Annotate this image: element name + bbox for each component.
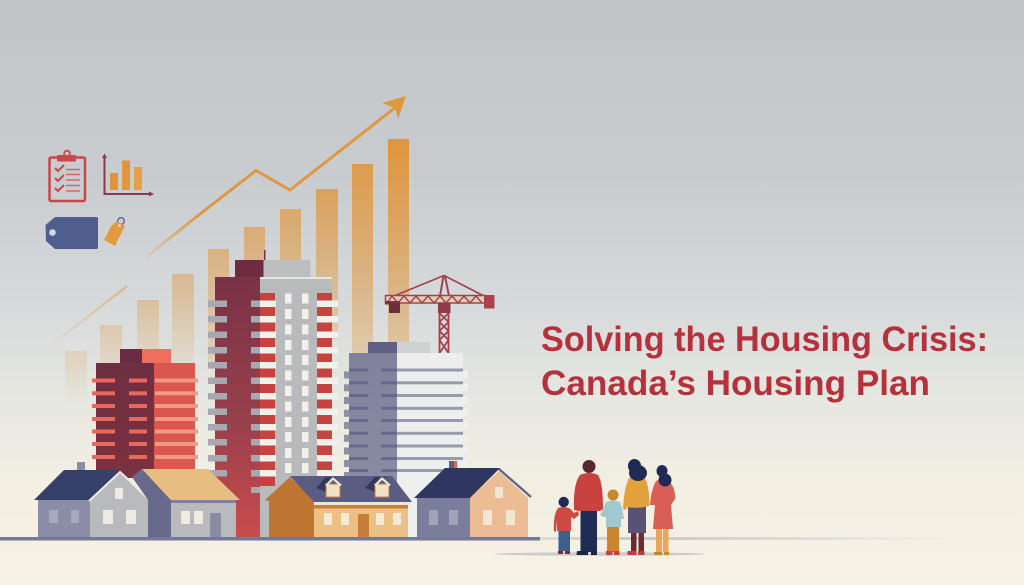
- figure: small child in red: [554, 497, 579, 554]
- icon: small bar chart: [102, 154, 154, 196]
- house: navy roof with peach gable: [414, 461, 531, 537]
- house: orange gable with dormers: [265, 476, 412, 537]
- building: tall red and grey tower: [208, 250, 338, 537]
- icon: blue price tag: [46, 217, 98, 249]
- building: maroon and coral block: [92, 349, 198, 478]
- family group: [554, 459, 675, 555]
- house: navy roof with grey gable: [34, 462, 151, 537]
- ground line: left: [0, 537, 540, 540]
- figure: child in light blue top: [600, 490, 624, 555]
- bar chart: rising orange bars: [65, 139, 409, 403]
- ground line: right: [500, 537, 960, 540]
- ground shadow under family: [495, 552, 705, 556]
- title: [541, 319, 988, 403]
- crane: [385, 276, 494, 353]
- house: tan roof: [132, 469, 240, 537]
- figure: woman in coral dress: [650, 465, 675, 555]
- title: Solving the Housing Crisis:: [541, 319, 988, 359]
- figure: man in red sweater: [574, 460, 603, 555]
- icon: orange price tag: [104, 218, 125, 246]
- icon: clipboard checklist: [50, 151, 85, 201]
- title: Canada’s Housing Plan: [541, 363, 930, 403]
- building: grey-blue and white office tower: [344, 342, 468, 537]
- figure: woman in yellow sweater and skirt: [623, 459, 649, 555]
- growth arrow: [48, 96, 406, 348]
